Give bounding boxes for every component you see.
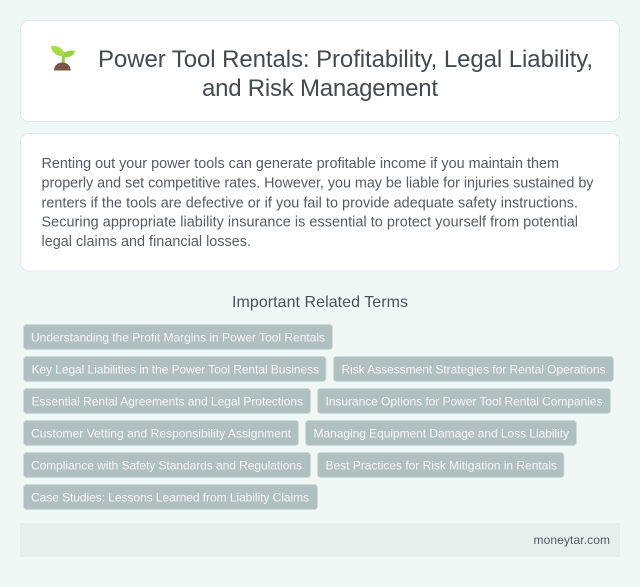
tag: customer vetting [24,420,298,446]
tag: customer vetting: Customer Vetting and Responsibility Assignment [31,426,292,440]
tag: safety compliance: Compliance with Safety Standards and Regulations [31,458,302,472]
description text: properly and set competitive rates. However, you may be liable for injuries sustained by [42,176,594,192]
tag: equipment damage: Managing Equipment Damage and Loss Liability [314,426,569,440]
description text: renters if the tools are defective or if you fail to provide adequate safety instructions. [42,196,578,212]
tag: case studies [24,484,318,510]
panel: title card [20,20,620,122]
tag: insurance options: Insurance Options for Power Tool Rental Companies [326,394,602,408]
panel: description card [20,134,620,271]
tag: rental agreements [24,388,310,414]
tag: safety compliance [24,452,310,478]
tag: legal liabilities: Key Legal Liabilities in the Power Tool Rental Business [32,362,319,376]
tag: equipment damage [306,420,576,446]
description text: Securing appropriate liability insurance is essential to protect yourself from potential [42,214,578,230]
tag: risk mitigation [318,452,564,478]
footer bar: moneytar.com [534,533,610,547]
tag: risk mitigation: Best Practices for Risk Mitigation in Rentals [326,458,557,472]
heading: important related terms: Important Related Terms [232,294,408,311]
tag: profit margins [24,324,332,350]
description text: legal claims and financial losses. [42,234,251,250]
tag: legal liabilities [24,356,326,382]
tag: risk assessment [334,356,614,382]
title text: and Risk Management [202,75,438,102]
description text: Renting out your power tools can generate profitable income if you maintain them [42,156,559,172]
tag: case studies: Case Studies: Lessons Learned from Liability Claims [31,490,309,504]
tag list [24,324,614,510]
title text: Power Tool Rentals: Profitability, Legal Liability, [98,46,593,73]
title text [98,46,593,102]
tag: insurance options [318,388,610,414]
icon: seedling [51,46,75,70]
tag: rental agreements: Essential Rental Agreements and Legal Protections [32,394,303,408]
tag: profit margins: Understanding the Profit Margins in Power Tool Rentals [31,330,325,344]
footer bar [20,523,620,557]
tag: risk assessment: Risk Assessment Strategies for Rental Operations [342,362,606,376]
description text [42,156,594,250]
